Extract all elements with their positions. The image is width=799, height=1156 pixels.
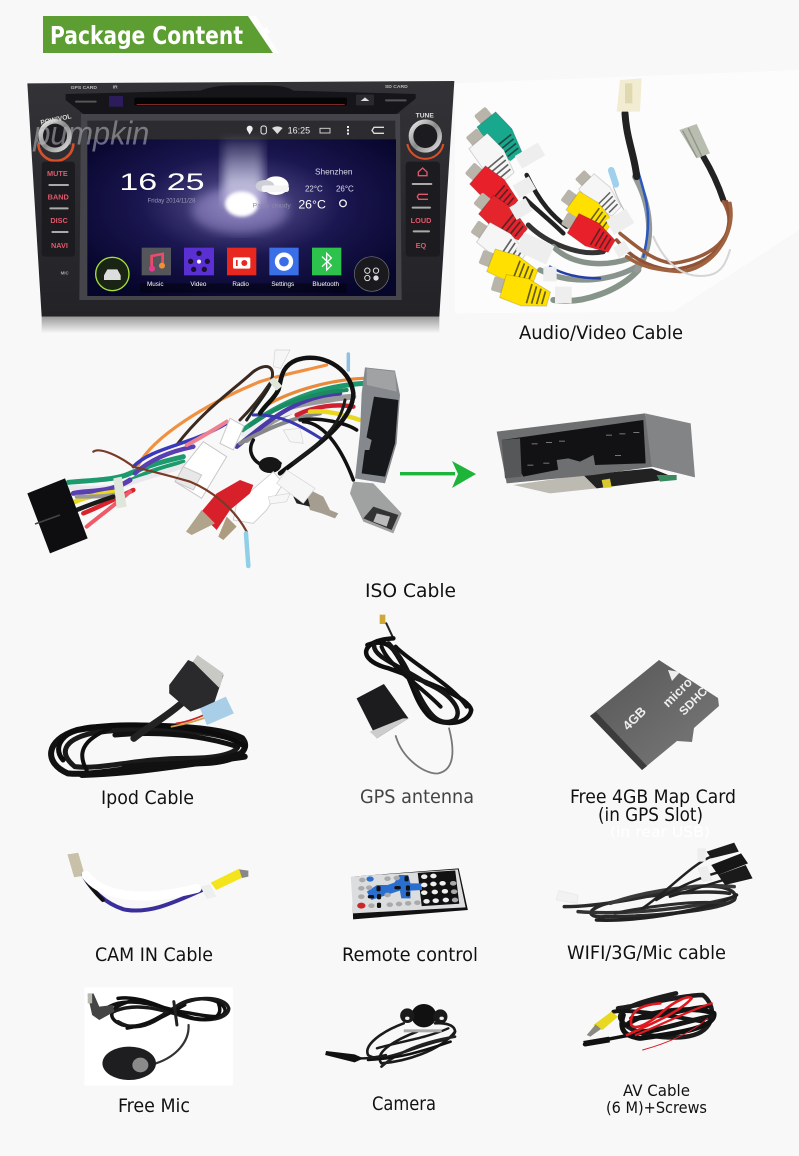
status bar <box>87 121 395 139</box>
clock widget <box>119 169 205 204</box>
screen wallpaper <box>87 139 396 296</box>
left button column: NAVI <box>51 241 68 250</box>
label: Audio/Video Cable: Audio/Video Cable <box>519 322 683 344</box>
panel: ISO cable photo <box>27 350 402 566</box>
icon: iPod cable <box>51 655 245 775</box>
weather widget <box>253 167 354 212</box>
label: ISO Cable: ISO Cable <box>365 580 456 602</box>
RCA plug: white upper <box>461 124 519 186</box>
screen bezel <box>79 114 402 300</box>
icon: AV cable <box>583 993 714 1050</box>
label: Free 4GB Map Card: Free 4GB Map Card <box>570 786 736 808</box>
weather widget: Partly cloudy <box>253 202 291 209</box>
wire tags <box>268 350 315 504</box>
icon: CAM IN cable <box>67 853 248 911</box>
weather widget: 26°C <box>298 198 326 212</box>
disc slot panel: SD CARD <box>385 84 408 90</box>
head unit body <box>27 81 454 317</box>
icon: WIFI/3G/Mic cable <box>556 843 753 920</box>
icon: free microphone <box>85 987 233 1086</box>
left volume knob <box>38 113 73 161</box>
right button column: EQ <box>416 241 427 250</box>
panel: audio/video cable photo <box>455 70 799 313</box>
cable tags <box>509 143 634 303</box>
left button column: MIC <box>61 271 69 276</box>
red RCA plug <box>186 480 253 535</box>
heading: Package Content: t <box>262 22 271 50</box>
RCA plug: red right <box>558 207 619 258</box>
RCA plug: yellow lower <box>489 270 552 313</box>
weather widget: 26°C <box>336 185 354 194</box>
label: AV Cable (6 M)+Screws: (6 M)+Screws <box>606 1098 707 1117</box>
weather widget: Shenzhen <box>315 167 353 177</box>
disc slot panel: IR <box>113 85 118 91</box>
disc slot panel: GPS CARD <box>71 85 97 91</box>
brand watermark: pumpkin <box>32 115 149 152</box>
left volume knob: POW/VOL <box>40 113 72 127</box>
app icons: Bluetooth <box>312 281 340 288</box>
cream connector <box>617 78 642 112</box>
label: Free 4GB Map Card <box>570 786 736 841</box>
label: WIFI/3G/Mic cable: WIFI/3G/Mic cable <box>567 942 726 964</box>
icon: micro SD card: micro <box>660 674 695 710</box>
zip ties <box>113 377 282 508</box>
left button column <box>42 162 75 276</box>
clock widget: Friday 2014/11/28 <box>148 198 196 204</box>
right tune knob: TUNE <box>416 112 434 119</box>
icon: micro SD card: SDHC <box>676 684 710 718</box>
app icons: Video <box>190 281 207 288</box>
panel: head unit photo <box>27 81 454 333</box>
blue heat-shrink tip <box>607 166 620 188</box>
car button <box>96 257 129 291</box>
clock widget: 16 25 <box>119 169 205 196</box>
icon: micro SD card: 4GB <box>620 704 649 733</box>
wire bundle <box>68 358 363 527</box>
status bar: 16:25 <box>288 125 310 135</box>
label: Free 4GB Map Card: (in rear USB) <box>610 823 710 841</box>
arrow: green <box>400 461 476 488</box>
left button column: MUTE <box>47 169 68 178</box>
black moulded barrel <box>259 457 281 473</box>
right button column <box>406 162 440 257</box>
small gray connector <box>350 482 402 533</box>
icon: remote control <box>351 868 468 919</box>
antenna plug <box>293 490 338 518</box>
RCA plug: yellow upper <box>476 243 540 290</box>
label: CAM IN Cable: CAM IN Cable <box>95 944 213 966</box>
RCA plug: red lower <box>469 187 532 245</box>
RCA plug: white right <box>571 166 625 220</box>
disc slot panel <box>66 84 416 114</box>
app icons: Music <box>147 281 164 288</box>
icon: GPS antenna <box>357 615 471 773</box>
white RCA plug <box>218 472 283 540</box>
left button column: BAND <box>48 193 69 202</box>
connector close-up <box>497 413 695 493</box>
label: Free 4GB Map Card: (in GPS Slot) <box>598 804 703 826</box>
left button column: DISC <box>50 216 69 225</box>
weather widget: 22°C <box>305 185 323 194</box>
RCA plug: teal <box>469 102 527 165</box>
RCA plug: white lower <box>467 215 530 270</box>
gray connector <box>679 124 710 158</box>
gray block connector <box>355 367 400 483</box>
RCA plug: red upper <box>460 157 522 217</box>
label: GPS antenna: GPS antenna <box>360 786 474 808</box>
label: AV Cable (6 M)+Screws: AV Cable <box>623 1081 690 1100</box>
label: AV Cable (6 M)+Screws <box>606 1081 707 1117</box>
icon: rear camera <box>325 1004 455 1067</box>
reflection below head unit <box>42 317 439 333</box>
white connector <box>175 418 244 498</box>
apps button <box>354 257 389 291</box>
icon: micro SD card <box>590 660 719 770</box>
right button column: LOUD <box>411 216 431 225</box>
app icons: Radio <box>232 281 249 288</box>
label: Remote control: Remote control <box>342 944 478 966</box>
black ISO plug <box>27 478 88 553</box>
gray and blue wires <box>525 107 731 301</box>
app icons: Settings <box>271 281 294 288</box>
photo backing <box>455 70 799 313</box>
brown thermistor wire <box>93 354 348 566</box>
app icons <box>142 248 341 288</box>
label: Free Mic: Free Mic <box>118 1095 190 1117</box>
label: Camera: Camera <box>372 1093 436 1115</box>
heading: Package Content: Package Content <box>50 21 243 50</box>
right tune knob <box>407 112 443 159</box>
label: Ipod Cable: Ipod Cable <box>101 787 194 809</box>
RCA plug: yellow right <box>557 184 617 238</box>
